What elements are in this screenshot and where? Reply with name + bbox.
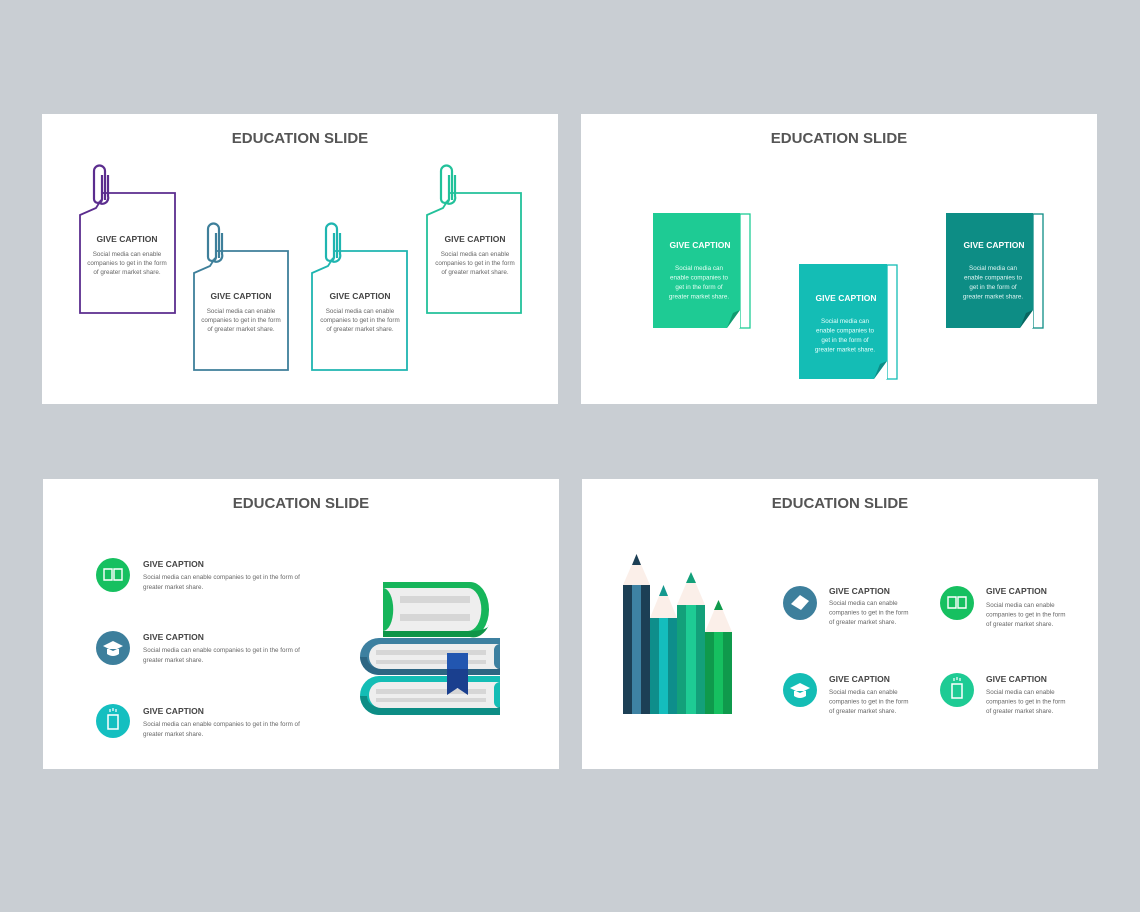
book card 1: GIVE CAPTION bbox=[670, 240, 730, 250]
book card 2: GIVE CAPTION bbox=[816, 293, 876, 303]
item: open book: companies to get in the form bbox=[986, 612, 1065, 618]
item 2 bbox=[96, 631, 300, 665]
heading: slide 2 title: EDUCATION SLIDE bbox=[771, 130, 907, 147]
book card 3: greater market share. bbox=[963, 294, 1023, 300]
item 3: greater market share. bbox=[143, 731, 203, 738]
heading: slide 1 title: EDUCATION SLIDE bbox=[232, 130, 368, 147]
panel: slide 1 sticky notes bbox=[42, 114, 558, 404]
note 1 purple bbox=[80, 166, 175, 313]
note 2 blue bbox=[194, 224, 288, 370]
book card 3: GIVE CAPTION bbox=[964, 240, 1024, 250]
panel: slide 3 list with book stack bbox=[43, 479, 559, 769]
note 2 blue: companies to get in the form bbox=[201, 317, 281, 324]
illustration: pencils bbox=[623, 554, 732, 714]
item: cup bbox=[940, 673, 1065, 715]
note 3 teal: Social media can enable bbox=[326, 308, 395, 315]
item: eraser bbox=[783, 586, 908, 626]
item 1: GIVE CAPTION bbox=[143, 559, 204, 569]
note 3 teal bbox=[312, 224, 407, 370]
item: open book: GIVE CAPTION bbox=[986, 586, 1047, 596]
item: graduation cap: GIVE CAPTION bbox=[829, 674, 890, 684]
item: graduation cap: companies to get in the form bbox=[829, 698, 908, 706]
item: graduation cap bbox=[783, 673, 908, 715]
book card 1: Social media can bbox=[675, 265, 723, 272]
note 3 teal: of greater market share. bbox=[326, 326, 394, 333]
note 2 blue: Social media can enable bbox=[207, 308, 276, 315]
book card 3: enable companies to bbox=[964, 274, 1023, 282]
item 2: Social media can enable companies to get in the form of bbox=[143, 647, 300, 654]
book card 1: enable companies to bbox=[670, 274, 729, 282]
illustration: stack of books bbox=[360, 582, 500, 715]
item: cup: GIVE CAPTION bbox=[986, 674, 1047, 684]
item 2: GIVE CAPTION bbox=[143, 632, 204, 642]
item: open book: of greater market share. bbox=[986, 621, 1053, 628]
item 3: GIVE CAPTION bbox=[143, 706, 204, 716]
item: cup: Social media can enable bbox=[986, 689, 1055, 696]
heading: slide 4 title: EDUCATION SLIDE bbox=[772, 495, 908, 512]
book card 2: get in the form of bbox=[821, 337, 869, 344]
item 1: Social media can enable companies to get in the form of bbox=[143, 574, 300, 581]
book card 2 bbox=[799, 264, 897, 379]
note 1 purple: of greater market share. bbox=[93, 269, 161, 276]
item: cup: of greater market share. bbox=[986, 708, 1053, 715]
note 2 blue: GIVE CAPTION bbox=[211, 291, 271, 301]
item: open book bbox=[940, 586, 1065, 628]
item: eraser: of greater market share. bbox=[829, 619, 896, 626]
item 2: greater market share. bbox=[143, 657, 203, 664]
note 3 teal: GIVE CAPTION bbox=[330, 291, 390, 301]
item: graduation cap: of greater market share. bbox=[829, 708, 896, 715]
book card 2: greater market share. bbox=[815, 346, 875, 354]
item: eraser: Social media can enable bbox=[829, 600, 898, 607]
book card 1: greater market share. bbox=[669, 294, 729, 300]
item: cup: companies to get in the form bbox=[986, 698, 1065, 706]
book card 3: get in the form of bbox=[969, 284, 1017, 291]
note 4 green: of greater market share. bbox=[441, 269, 509, 276]
note 4 green: companies to get in the form bbox=[435, 260, 515, 267]
item: graduation cap: Social media can enable bbox=[829, 689, 898, 696]
note 1 purple: GIVE CAPTION bbox=[97, 234, 157, 244]
note 1 purple: companies to get in the form bbox=[87, 260, 167, 267]
item 1 bbox=[96, 558, 300, 592]
book card 3: Social media can bbox=[969, 265, 1017, 272]
item 3: Social media can enable companies to get in the form of bbox=[143, 721, 300, 728]
note 2 blue: of greater market share. bbox=[207, 326, 275, 333]
item: eraser: GIVE CAPTION bbox=[829, 586, 890, 596]
book card 1: get in the form of bbox=[675, 284, 723, 291]
note 1 purple: Social media can enable bbox=[93, 251, 162, 258]
panel: slide 2 books bbox=[581, 114, 1097, 404]
book card 3 bbox=[946, 213, 1043, 328]
note 4 green: Social media can enable bbox=[441, 251, 510, 258]
note 4 green: GIVE CAPTION bbox=[445, 234, 505, 244]
item: open book: Social media can enable bbox=[986, 602, 1055, 609]
book card 1 bbox=[653, 213, 750, 328]
item 3 bbox=[96, 704, 300, 738]
note 3 teal: companies to get in the form bbox=[320, 317, 400, 324]
book card 2: enable companies to bbox=[816, 328, 875, 334]
panel: slide 4 pencils with icon list bbox=[582, 479, 1098, 769]
item: eraser: companies to get in the form bbox=[829, 610, 908, 616]
note 4 green bbox=[427, 166, 521, 313]
book card 2: Social media can bbox=[821, 318, 869, 325]
item 1: greater market share. bbox=[143, 584, 203, 591]
heading: slide 3 title: EDUCATION SLIDE bbox=[233, 495, 369, 512]
